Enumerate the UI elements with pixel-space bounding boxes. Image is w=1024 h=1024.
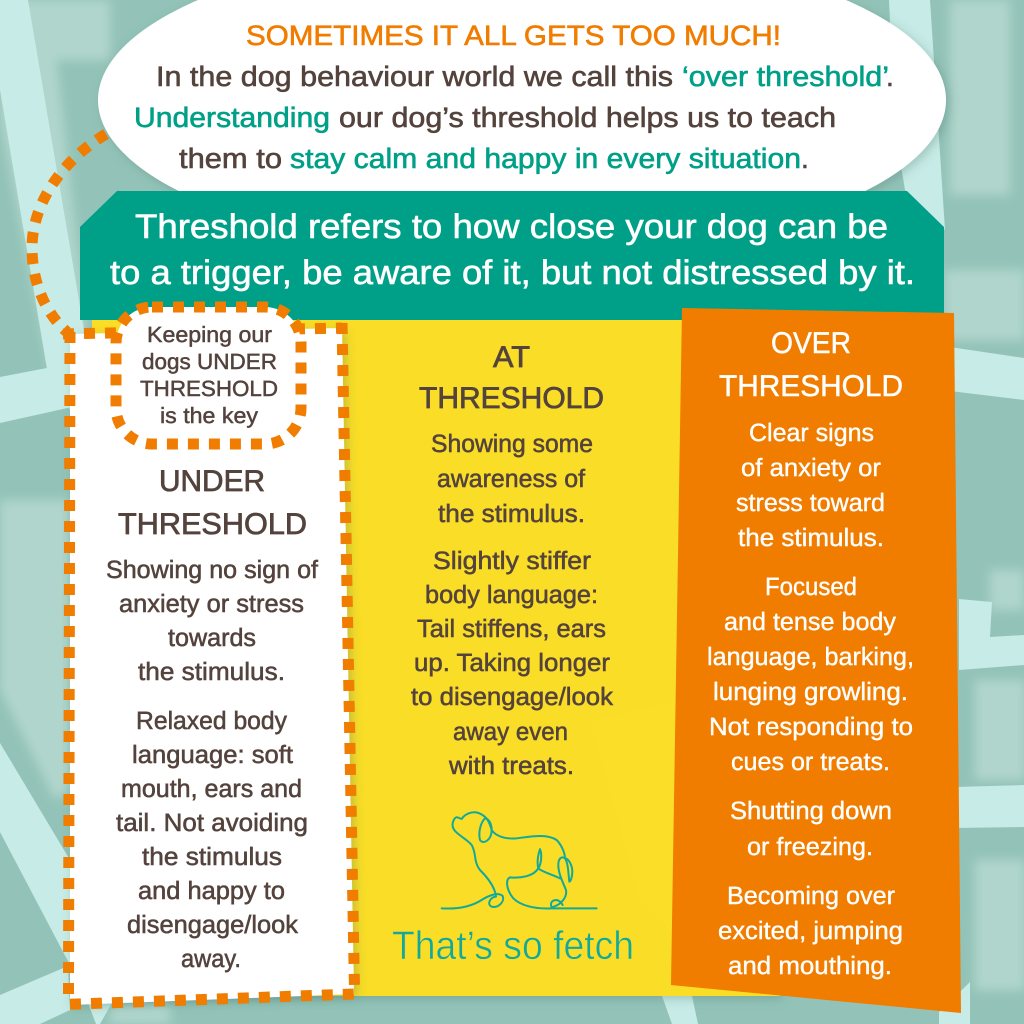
at threshold body: Tail stiffens, ears — [417, 615, 606, 643]
panel: under threshold — [63, 323, 354, 1005]
over threshold body: stress toward — [736, 489, 885, 517]
over threshold body: of anxiety or — [741, 454, 881, 482]
over threshold body: Shutting down — [730, 797, 892, 825]
over threshold body: or freezing. — [747, 833, 873, 861]
over threshold body: Clear signs — [749, 419, 874, 447]
callout: keeping under threshold: THRESHOLD — [140, 376, 278, 401]
over threshold heading — [719, 327, 903, 403]
at threshold body — [411, 430, 614, 780]
at threshold body: Showing some — [431, 430, 593, 458]
bubble title: SOMETIMES IT ALL GETS TOO MUCH! — [246, 20, 781, 51]
under threshold heading — [118, 465, 307, 541]
logo wordmark: That’s so fetch — [392, 924, 634, 968]
under threshold body: the stimulus — [142, 843, 282, 871]
at threshold body: Slightly stiffer — [433, 547, 591, 575]
at threshold heading: AT — [493, 341, 530, 374]
connector dotted arc — [32, 134, 106, 332]
bubble text lines: In the dog behaviour world we call this — [156, 61, 673, 92]
at threshold body: to disengage/look — [411, 683, 614, 711]
over threshold body: Not responding to — [709, 713, 913, 741]
bubble text lines: stay calm and happy in every situation — [290, 143, 801, 174]
at threshold body: body language: — [425, 581, 598, 609]
callout: keeping under threshold — [116, 307, 301, 444]
over threshold body: language, barking, — [707, 643, 914, 671]
definition banner: to a trigger, be aware of it, but not distressed by it. — [110, 254, 915, 292]
at threshold body: with treats. — [448, 752, 574, 780]
under threshold body: disengage/look — [127, 911, 298, 939]
panel: over threshold — [671, 308, 961, 1013]
icon: line drawing dog — [442, 812, 597, 909]
definition banner: Threshold refers to how close your dog can be — [135, 208, 888, 246]
over threshold heading: THRESHOLD — [719, 370, 903, 403]
over threshold body: excited, jumping — [718, 917, 903, 945]
bubble text lines: ‘over threshold’ — [682, 61, 889, 92]
over threshold body: lunging growling. — [713, 678, 908, 706]
at threshold body: the stimulus. — [438, 500, 585, 528]
bubble text lines: . — [886, 61, 894, 92]
bubble text lines: Understanding — [134, 102, 330, 133]
at threshold body: up. Taking longer — [414, 649, 610, 677]
under threshold body: tail. Not avoiding — [116, 809, 308, 837]
under threshold heading: UNDER — [159, 465, 265, 498]
bubble text lines: . — [801, 143, 809, 174]
over threshold heading: OVER — [771, 327, 851, 360]
at threshold body: away even — [453, 718, 568, 746]
yellow panel — [92, 320, 780, 996]
callout: keeping under threshold: is the key — [160, 403, 258, 428]
panel: at threshold text — [411, 341, 614, 780]
under threshold body — [106, 556, 318, 973]
under threshold body: mouth, ears and — [121, 775, 302, 803]
under threshold body: the stimulus. — [138, 658, 285, 686]
under threshold body: language: soft — [132, 741, 293, 769]
over threshold body: and tense body — [724, 608, 896, 636]
speech bubble — [98, 0, 946, 255]
over threshold body — [707, 419, 914, 980]
under threshold heading: THRESHOLD — [118, 508, 307, 541]
over threshold body: Becoming over — [727, 882, 895, 910]
callout: keeping under threshold: dogs UNDER — [142, 349, 277, 374]
definition banner — [80, 191, 944, 320]
bubble text lines: them to — [179, 143, 282, 174]
over threshold body: and mouthing. — [728, 952, 892, 980]
over threshold body: the stimulus. — [738, 524, 884, 552]
under threshold body: Showing no sign of — [106, 556, 318, 584]
under threshold body: towards — [168, 624, 256, 652]
at threshold body: awareness of — [437, 465, 585, 493]
over threshold body: Focused — [765, 573, 857, 601]
under threshold body: away. — [181, 945, 241, 973]
under threshold body: Relaxed body — [136, 707, 287, 735]
at threshold heading: THRESHOLD — [419, 382, 604, 415]
over threshold body: cues or treats. — [731, 748, 890, 776]
callout: keeping under threshold: Keeping our — [147, 322, 272, 347]
under threshold body: anxiety or stress — [119, 590, 304, 618]
at threshold heading — [419, 341, 604, 415]
bubble text lines: our dog’s threshold helps us to teach — [339, 102, 836, 133]
under threshold body: and happy to — [138, 877, 285, 905]
bubble text lines — [134, 61, 894, 174]
